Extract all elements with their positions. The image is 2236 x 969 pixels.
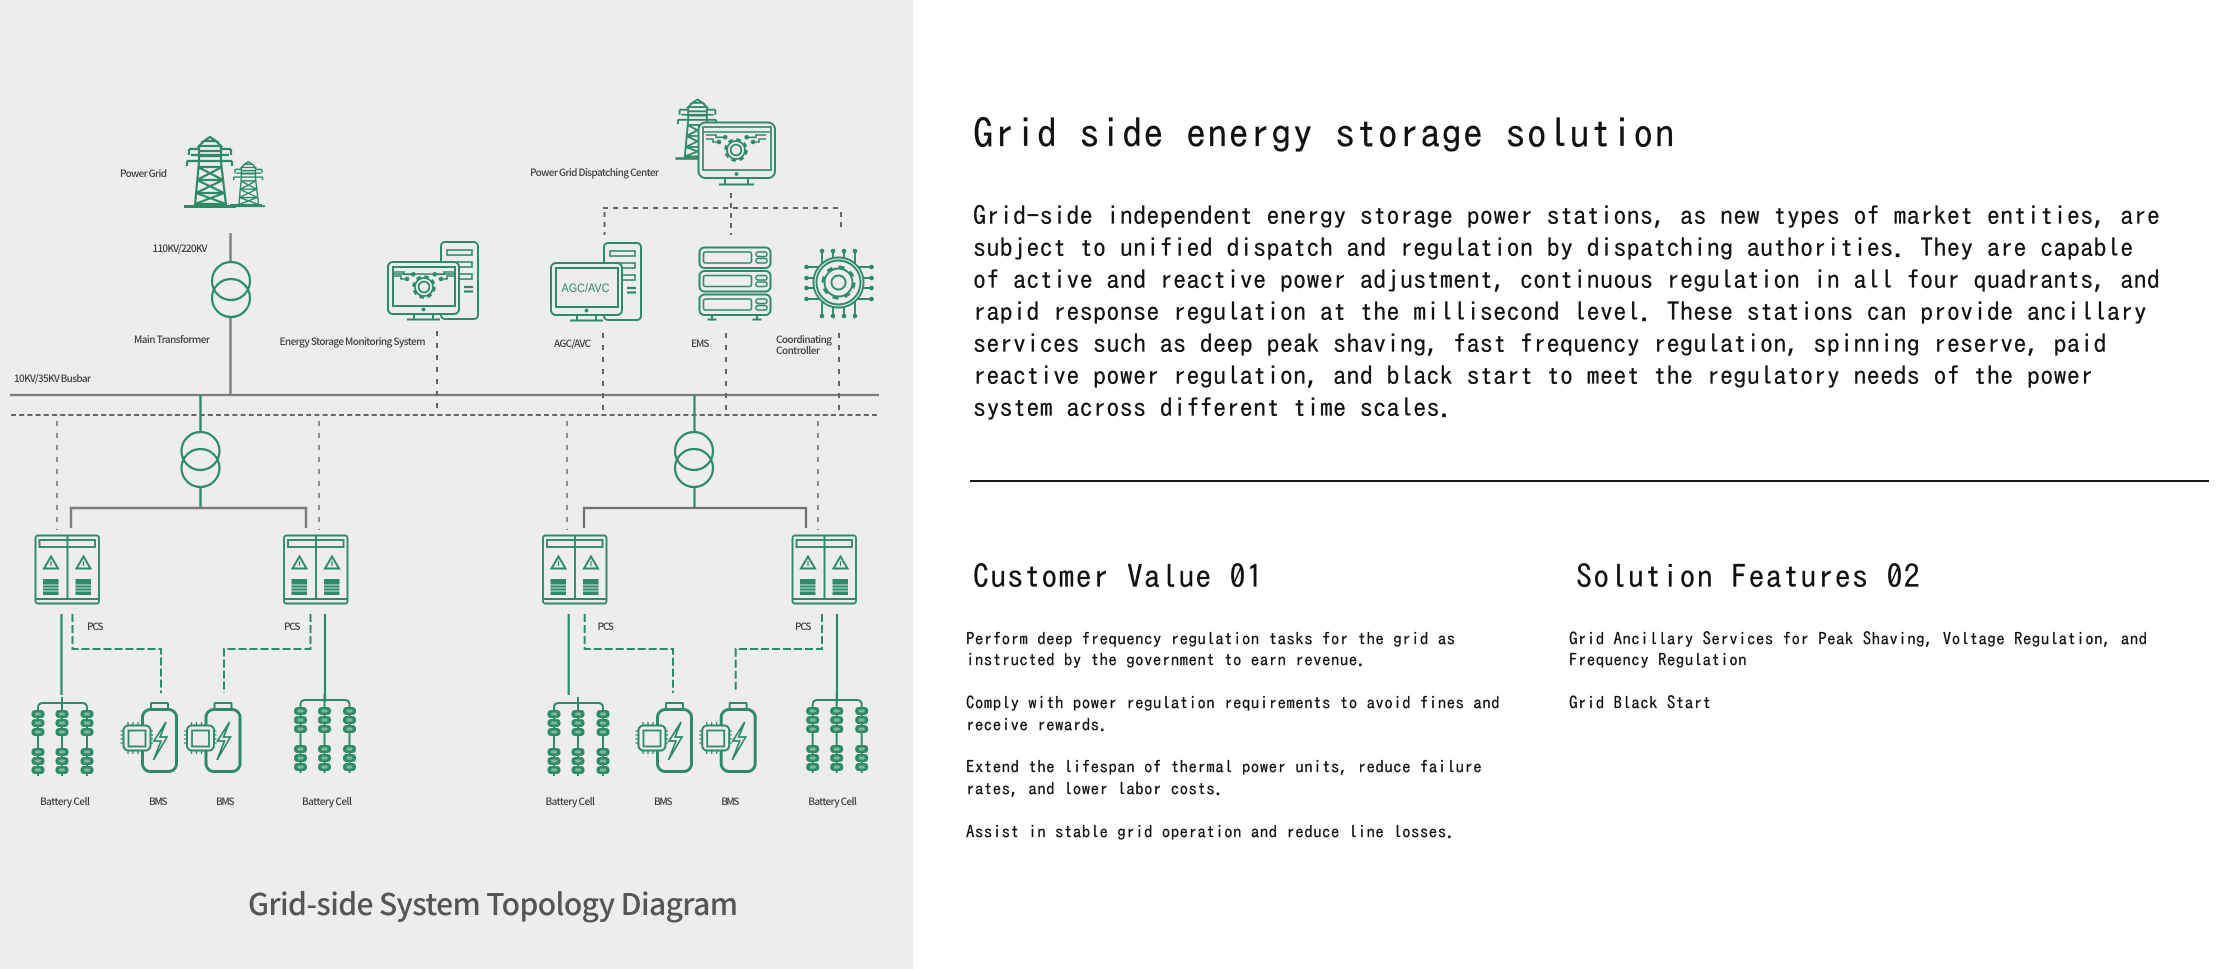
bottom labels: Battery Cell [546, 793, 595, 808]
intro paragraph: services such as deep peak shaving, fast frequency regulation, spinning reserve, paid [973, 330, 2107, 356]
bottom labels: Battery Cell [302, 793, 352, 808]
icon: PCS 4 [792, 536, 856, 604]
PCS labels: PCS [598, 618, 614, 633]
icon: power grid dispatching center [675, 99, 775, 184]
label: dispatching center: Power Grid Dispatching Center [530, 164, 660, 179]
intro paragraph: reactive power regulation, and black start to meet the regulatory needs of the power [973, 362, 2094, 388]
intro paragraph: Grid-side independent energy storage power stations, as new types of market entities, are [973, 202, 2160, 228]
PCS labels: PCS [284, 618, 300, 633]
icon: BMS 3 [636, 703, 692, 772]
icon: battery cell 4 [806, 694, 868, 773]
solution features list: Frequency Regulation [1569, 652, 1747, 669]
left branch feeder [71, 508, 306, 528]
dashed communication bus [11, 414, 879, 416]
label: coordinating controller [776, 331, 832, 357]
customer value list: rates, and lower labor costs. [966, 781, 1224, 798]
intro paragraph [973, 202, 2160, 420]
customer value list: instructed by the government to earn revenue. [966, 652, 1366, 669]
solution features list: Grid Ancillary Services for Peak Shaving, Voltage Regulation, and [1569, 631, 2148, 648]
icon: energy storage monitoring system [388, 242, 478, 320]
right branch transformer [675, 395, 713, 508]
intro paragraph: rapid response regulation at the millisecond level. These stations can provide ancillary [973, 298, 2147, 324]
bottom labels: Battery Cell [808, 793, 857, 808]
label: main transformer: Main Transformer [134, 331, 211, 346]
label: power grid: Power Grid [120, 165, 167, 180]
label: AGC/AVC: AGC/AVC [554, 335, 592, 350]
PCS labels: PCS [87, 618, 104, 633]
icon: BMS 2 [184, 703, 240, 772]
customer value list: Assist in stable grid operation and reduce line losses. [966, 824, 1456, 841]
icon: coordinating controller [804, 249, 874, 318]
intro paragraph: system across different time scales. [973, 394, 1453, 420]
icon: power grid towers [184, 137, 265, 208]
bottom labels: BMS [216, 793, 234, 808]
divider [970, 480, 2209, 482]
solution features list [1569, 631, 2148, 712]
dashed BMS links [72, 614, 822, 693]
label: EMS: EMS [691, 335, 710, 350]
icon: battery cell 3 [548, 697, 610, 776]
icon: EMS server [700, 248, 770, 320]
diagram caption: Grid-side System Topology Diagram [248, 880, 738, 924]
left branch dashed control lines [57, 421, 319, 530]
icon: PCS 2 [284, 536, 348, 604]
label: busbar: 10KV/35KV Busbar [14, 370, 92, 385]
label: energy storage monitoring system: Energy Storage Monitoring System [280, 333, 426, 348]
solution features list: Grid Black Start [1569, 695, 1711, 712]
icon: PCS 1 [36, 536, 99, 604]
right branch feeder [584, 508, 806, 528]
customer value list: Perform deep frequency regulation tasks for the grid as [966, 631, 1456, 648]
customer value list: receive rewards. [966, 717, 1108, 734]
icon: battery cell 1 [32, 697, 94, 776]
dashed links down to bus [437, 331, 839, 411]
solid DC lines [62, 614, 837, 702]
dispatch dashed links [603, 193, 841, 235]
bottom labels: Battery Cell [40, 793, 90, 808]
bottom labels: BMS [654, 793, 672, 808]
heading: solution features: Solution Features 02 [1576, 560, 1921, 592]
panel: grid-side system topology diagram [0, 0, 913, 969]
main transformer line and symbol [212, 233, 250, 395]
PCS labels: PCS [795, 618, 812, 633]
customer value list [966, 631, 1500, 841]
icon: AGC/AVC computer [551, 243, 641, 320]
customer value list: Extend the lifespan of thermal power units, reduce failure [966, 759, 1482, 776]
PCS labels [87, 618, 812, 633]
busbar [10, 394, 879, 396]
right branch dashed control lines [567, 421, 818, 530]
title: Grid side energy storage solution [973, 113, 1676, 153]
intro paragraph: of active and reactive power adjustment, continuous regulation in all four quadrants, and [973, 266, 2160, 292]
intro paragraph: subject to unified dispatch and regulation by dispatching authorities. They are capable [973, 234, 2134, 260]
label: voltage: 110KV/220KV [152, 240, 208, 255]
bottom labels: BMS [721, 793, 739, 808]
left branch transformer [182, 395, 220, 508]
icon: battery cell 2 [294, 694, 356, 773]
icon: PCS 3 [543, 536, 606, 604]
heading: customer value: Customer Value 01 [973, 560, 1264, 592]
bottom labels: BMS [149, 793, 168, 808]
bottom labels [40, 793, 857, 808]
customer value list: Comply with power regulation requirements to avoid fines and [966, 695, 1500, 712]
label: coordinating controller: Controller [776, 342, 821, 357]
icon: BMS 1 [120, 703, 176, 772]
label: coordinating controller: Coordinating [776, 331, 832, 346]
icon: BMS 4 [699, 703, 755, 772]
icon: AGC/AVC computer: AGC/AVC [562, 283, 610, 295]
